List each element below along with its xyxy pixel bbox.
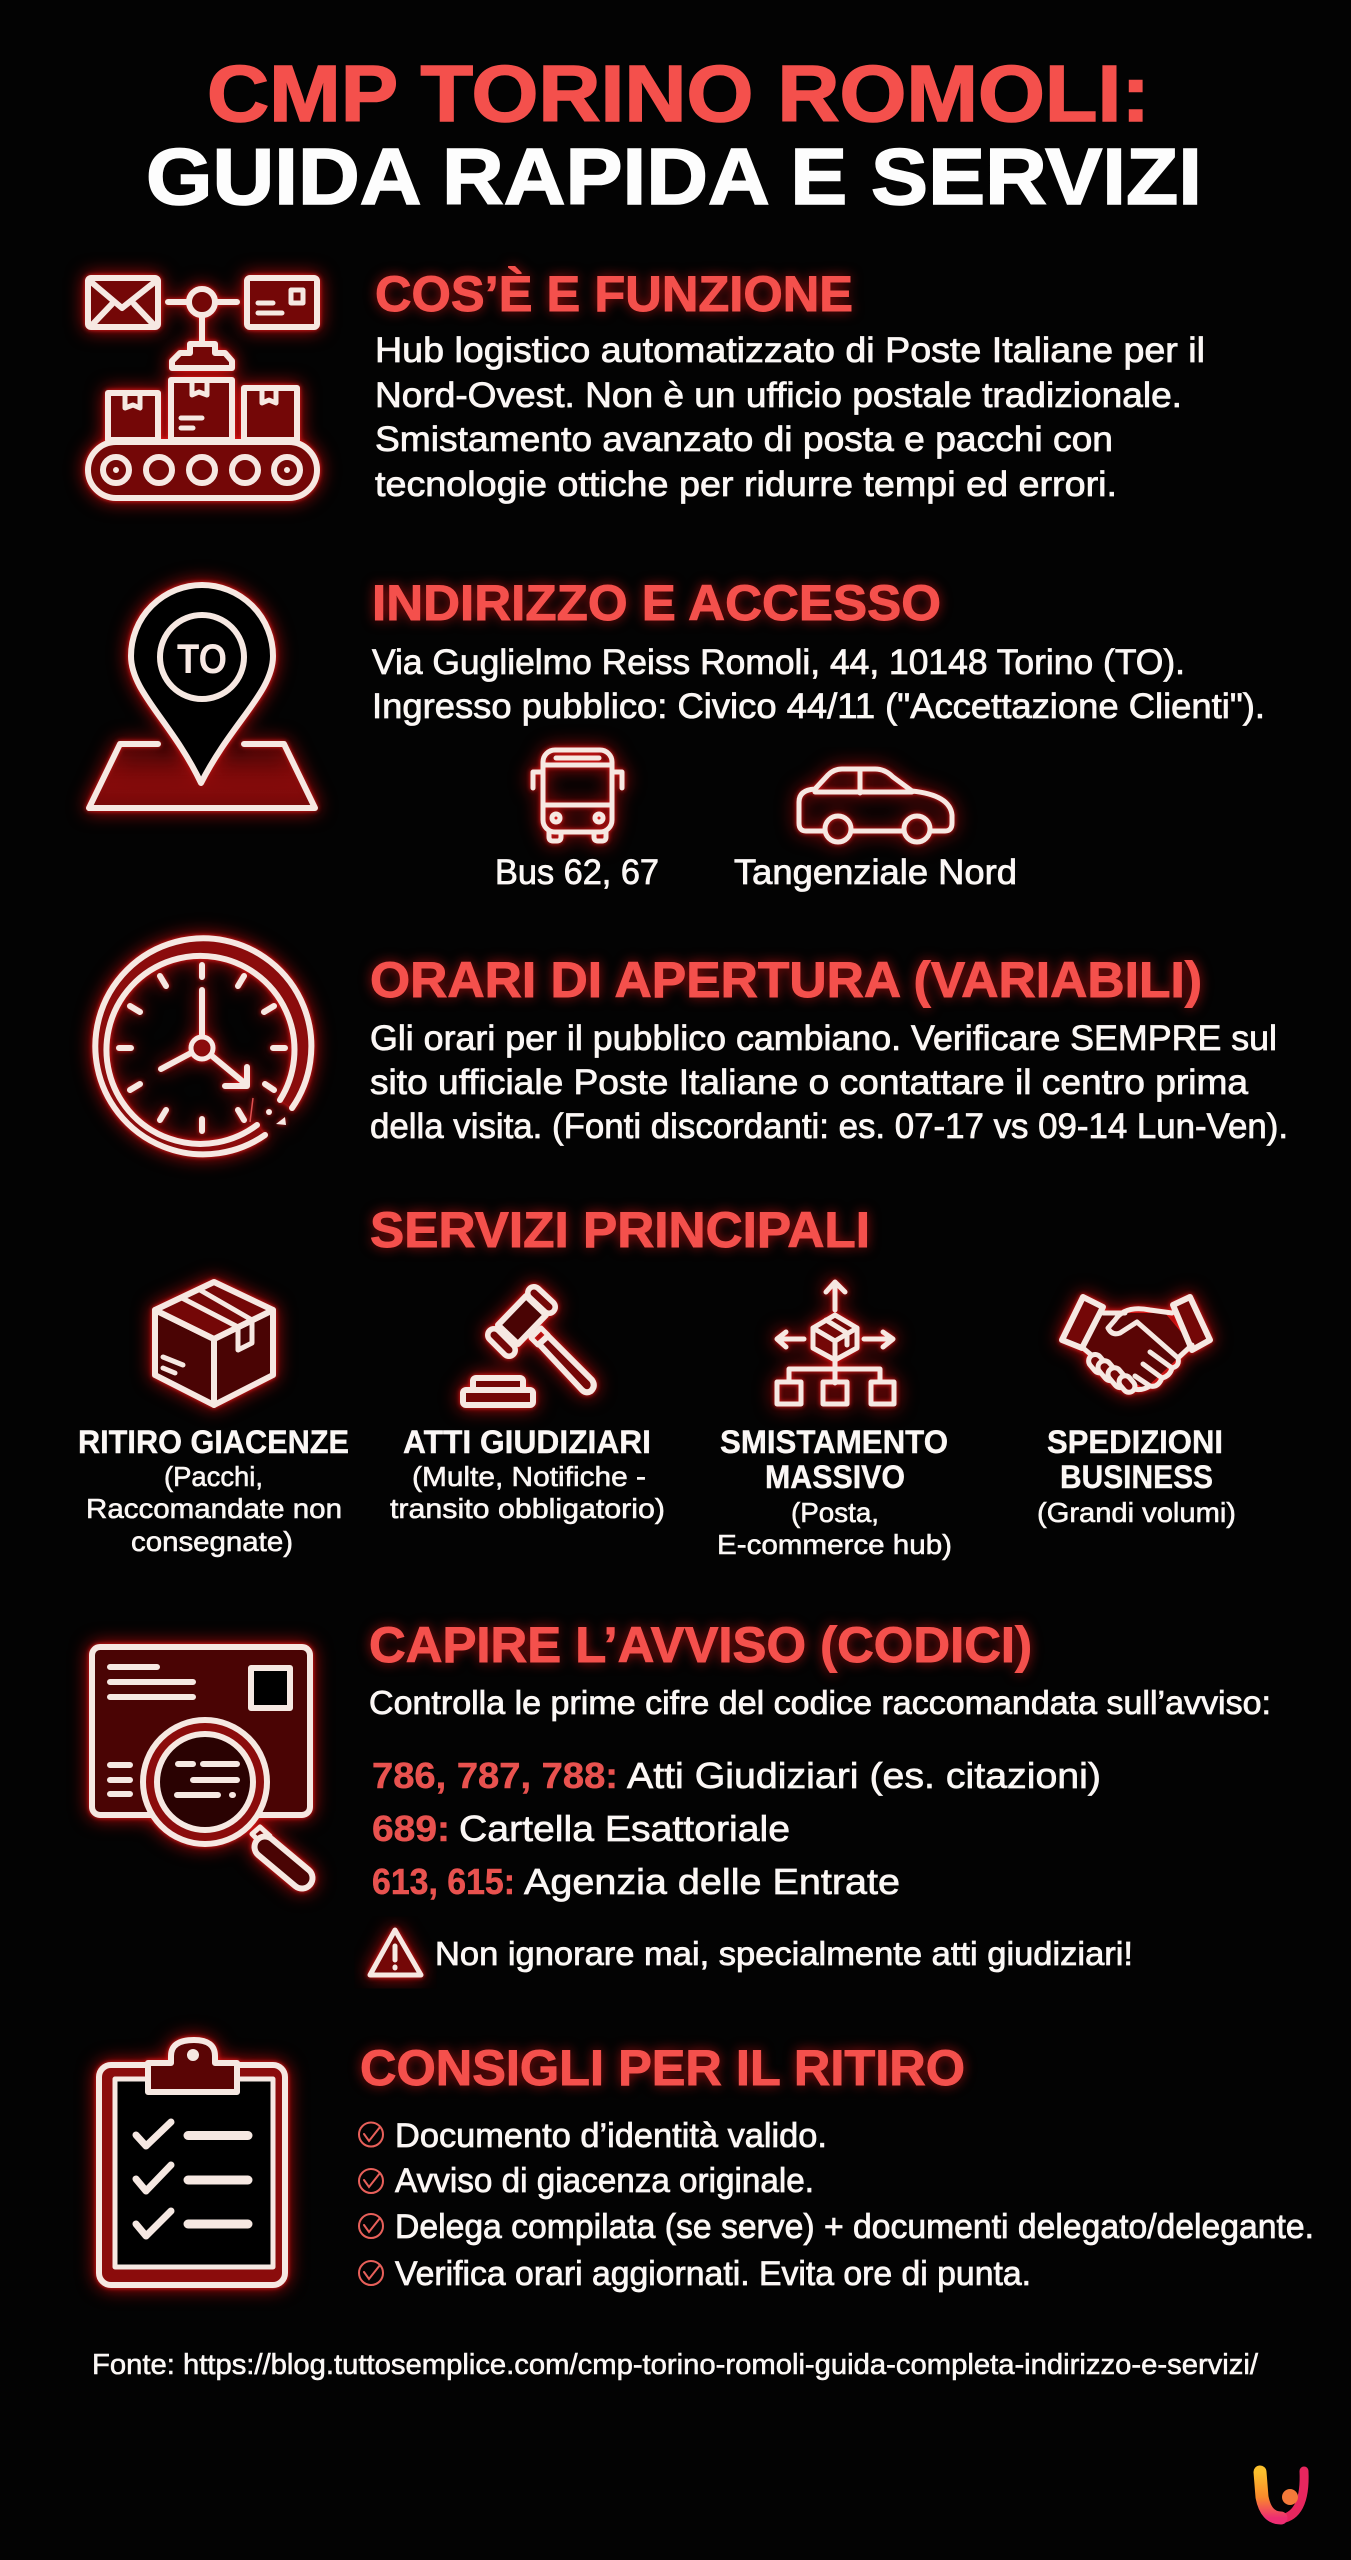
text: (Multe, Notifiche - [412, 1461, 646, 1492]
warning text: Non ignorare mai, specialmente atti giudiziari! [435, 1935, 1133, 1972]
code row: agenzia delle entrate [372, 1861, 900, 1902]
icon: bus [533, 750, 622, 841]
heading: CONSIGLI PER IL RITIRO [360, 2040, 965, 2096]
icon: gavel [463, 1293, 594, 1405]
text block: Smistamento avanzato di posta e pacchi con [375, 420, 1113, 459]
text: SPEDIZIONI [1047, 1424, 1223, 1460]
text: E-commerce hub) [717, 1529, 952, 1560]
icon: car [799, 769, 952, 842]
checklist [359, 2117, 1314, 2293]
icon: brand logo [1260, 2471, 1304, 2519]
code row: atti giudiziari: Atti Giudiziari (es. citazioni) [627, 1755, 1101, 1796]
text block: tecnologie ottiche per ridurre tempi ed errori. [375, 465, 1117, 504]
text: RITIRO GIACENZE [78, 1424, 349, 1460]
code row: atti giudiziari [372, 1755, 1101, 1796]
code row: agenzia delle entrate: 613, 615: [372, 1861, 515, 1902]
icon: map pin [89, 585, 315, 808]
text block [370, 1019, 1288, 1146]
text: (Grandi volumi) [1037, 1497, 1236, 1528]
text block [372, 643, 1265, 726]
panel: consigli per il ritiro [99, 2040, 1314, 2293]
code row: cartella esattoriale: Cartella Esattoriale [459, 1808, 790, 1849]
code row: agenzia delle entrate: Agenzia delle Entrate [524, 1861, 900, 1902]
heading: SERVIZI PRINCIPALI [370, 1202, 870, 1258]
text block: della visita. (Fonti discordanti: es. 07-17 vs 09-14 Lun-Ven). [370, 1107, 1288, 1146]
text block: Controlla le prime cifre del codice raccomandata sull’avviso: [369, 1684, 1271, 1721]
text: consegnate) [131, 1526, 293, 1557]
text: ATTI GIUDIZIARI [403, 1424, 651, 1460]
text: transito obbligatorio) [390, 1493, 665, 1524]
label: car: Tangenziale Nord [734, 853, 1017, 892]
check item: avviso: Avviso di giacenza originale. [395, 2162, 814, 2200]
icon: sorting conveyor [88, 278, 317, 498]
text block [375, 331, 1205, 504]
service: ritiro giacenze [78, 1282, 349, 1557]
service: atti giudiziari [390, 1293, 665, 1524]
text: Raccomandate non [86, 1493, 342, 1524]
icon: clock [95, 938, 311, 1154]
text: (Pacchi, [164, 1461, 263, 1492]
text [1037, 1424, 1236, 1528]
label: bus: Bus 62, 67 [495, 853, 659, 892]
service: spedizioni business [1037, 1297, 1236, 1528]
panel: cos'è e funzione [88, 266, 1205, 504]
panel: orari di apertura [95, 938, 1288, 1154]
text [78, 1424, 349, 1557]
icon: clipboard [99, 2040, 285, 2285]
text [390, 1424, 665, 1524]
text block: Via Guglielmo Reiss Romoli, 44, 10148 Torino (TO). [372, 643, 1185, 682]
icon: notice with magnifier [92, 1647, 310, 1878]
text block: Nord-Ovest. Non è un ufficio postale tradizionale. [375, 376, 1182, 415]
heading: INDIRIZZO E ACCESSO [372, 575, 941, 631]
code row: cartella esattoriale: 689: [372, 1808, 450, 1849]
text: BUSINESS [1060, 1459, 1213, 1495]
panel: capire l'avviso [92, 1617, 1271, 1975]
text block: Hub logistico automatizzato di Poste Italiane per il [375, 331, 1205, 370]
text block: Ingresso pubblico: Civico 44/11 ("Accettazione Clienti"). [372, 687, 1265, 726]
check item: verifica: Verifica orari aggiornati. Evita ore di punta. [395, 2255, 1031, 2293]
icon: distribution hub [777, 1282, 894, 1404]
title [146, 49, 1202, 221]
check item: documento: Documento d’identità valido. [395, 2117, 827, 2155]
text: MASSIVO [765, 1459, 905, 1495]
text [717, 1424, 952, 1560]
heading: COS’È E FUNZIONE [375, 266, 853, 322]
check item: delega: Delega compilata (se serve) + documenti delegato/delegante. [395, 2208, 1314, 2246]
title: GUIDA RAPIDA E SERVIZI [146, 132, 1202, 221]
text: (Posta, [791, 1497, 879, 1528]
title: CMP TORINO ROMOLI: [207, 49, 1150, 138]
source footer: Fonte: https://blog.tuttosemplice.com/cmp-torino-romoli-guida-completa-indirizzo-e-servizi/ [92, 2349, 1259, 2381]
panel: indirizzo e accesso [89, 575, 1265, 892]
icon: handshake [1062, 1297, 1210, 1395]
text block: sito ufficiale Poste Italiane o contattare il centro prima [370, 1063, 1249, 1102]
heading: CAPIRE L’AVVISO (CODICI) [369, 1617, 1032, 1673]
code row: atti giudiziari: 786, 787, 788: [372, 1755, 618, 1796]
icon: warning triangle [370, 1930, 421, 1975]
heading: ORARI DI APERTURA (VARIABILI) [370, 952, 1202, 1008]
service: smistamento massivo [717, 1282, 952, 1560]
icon: parcel box [155, 1282, 273, 1405]
icon: map pin: TO [177, 635, 227, 682]
text: SMISTAMENTO [720, 1424, 948, 1460]
panel: servizi principali [78, 1202, 1236, 1560]
text block: Gli orari per il pubblico cambiano. Verificare SEMPRE sul [370, 1019, 1277, 1058]
